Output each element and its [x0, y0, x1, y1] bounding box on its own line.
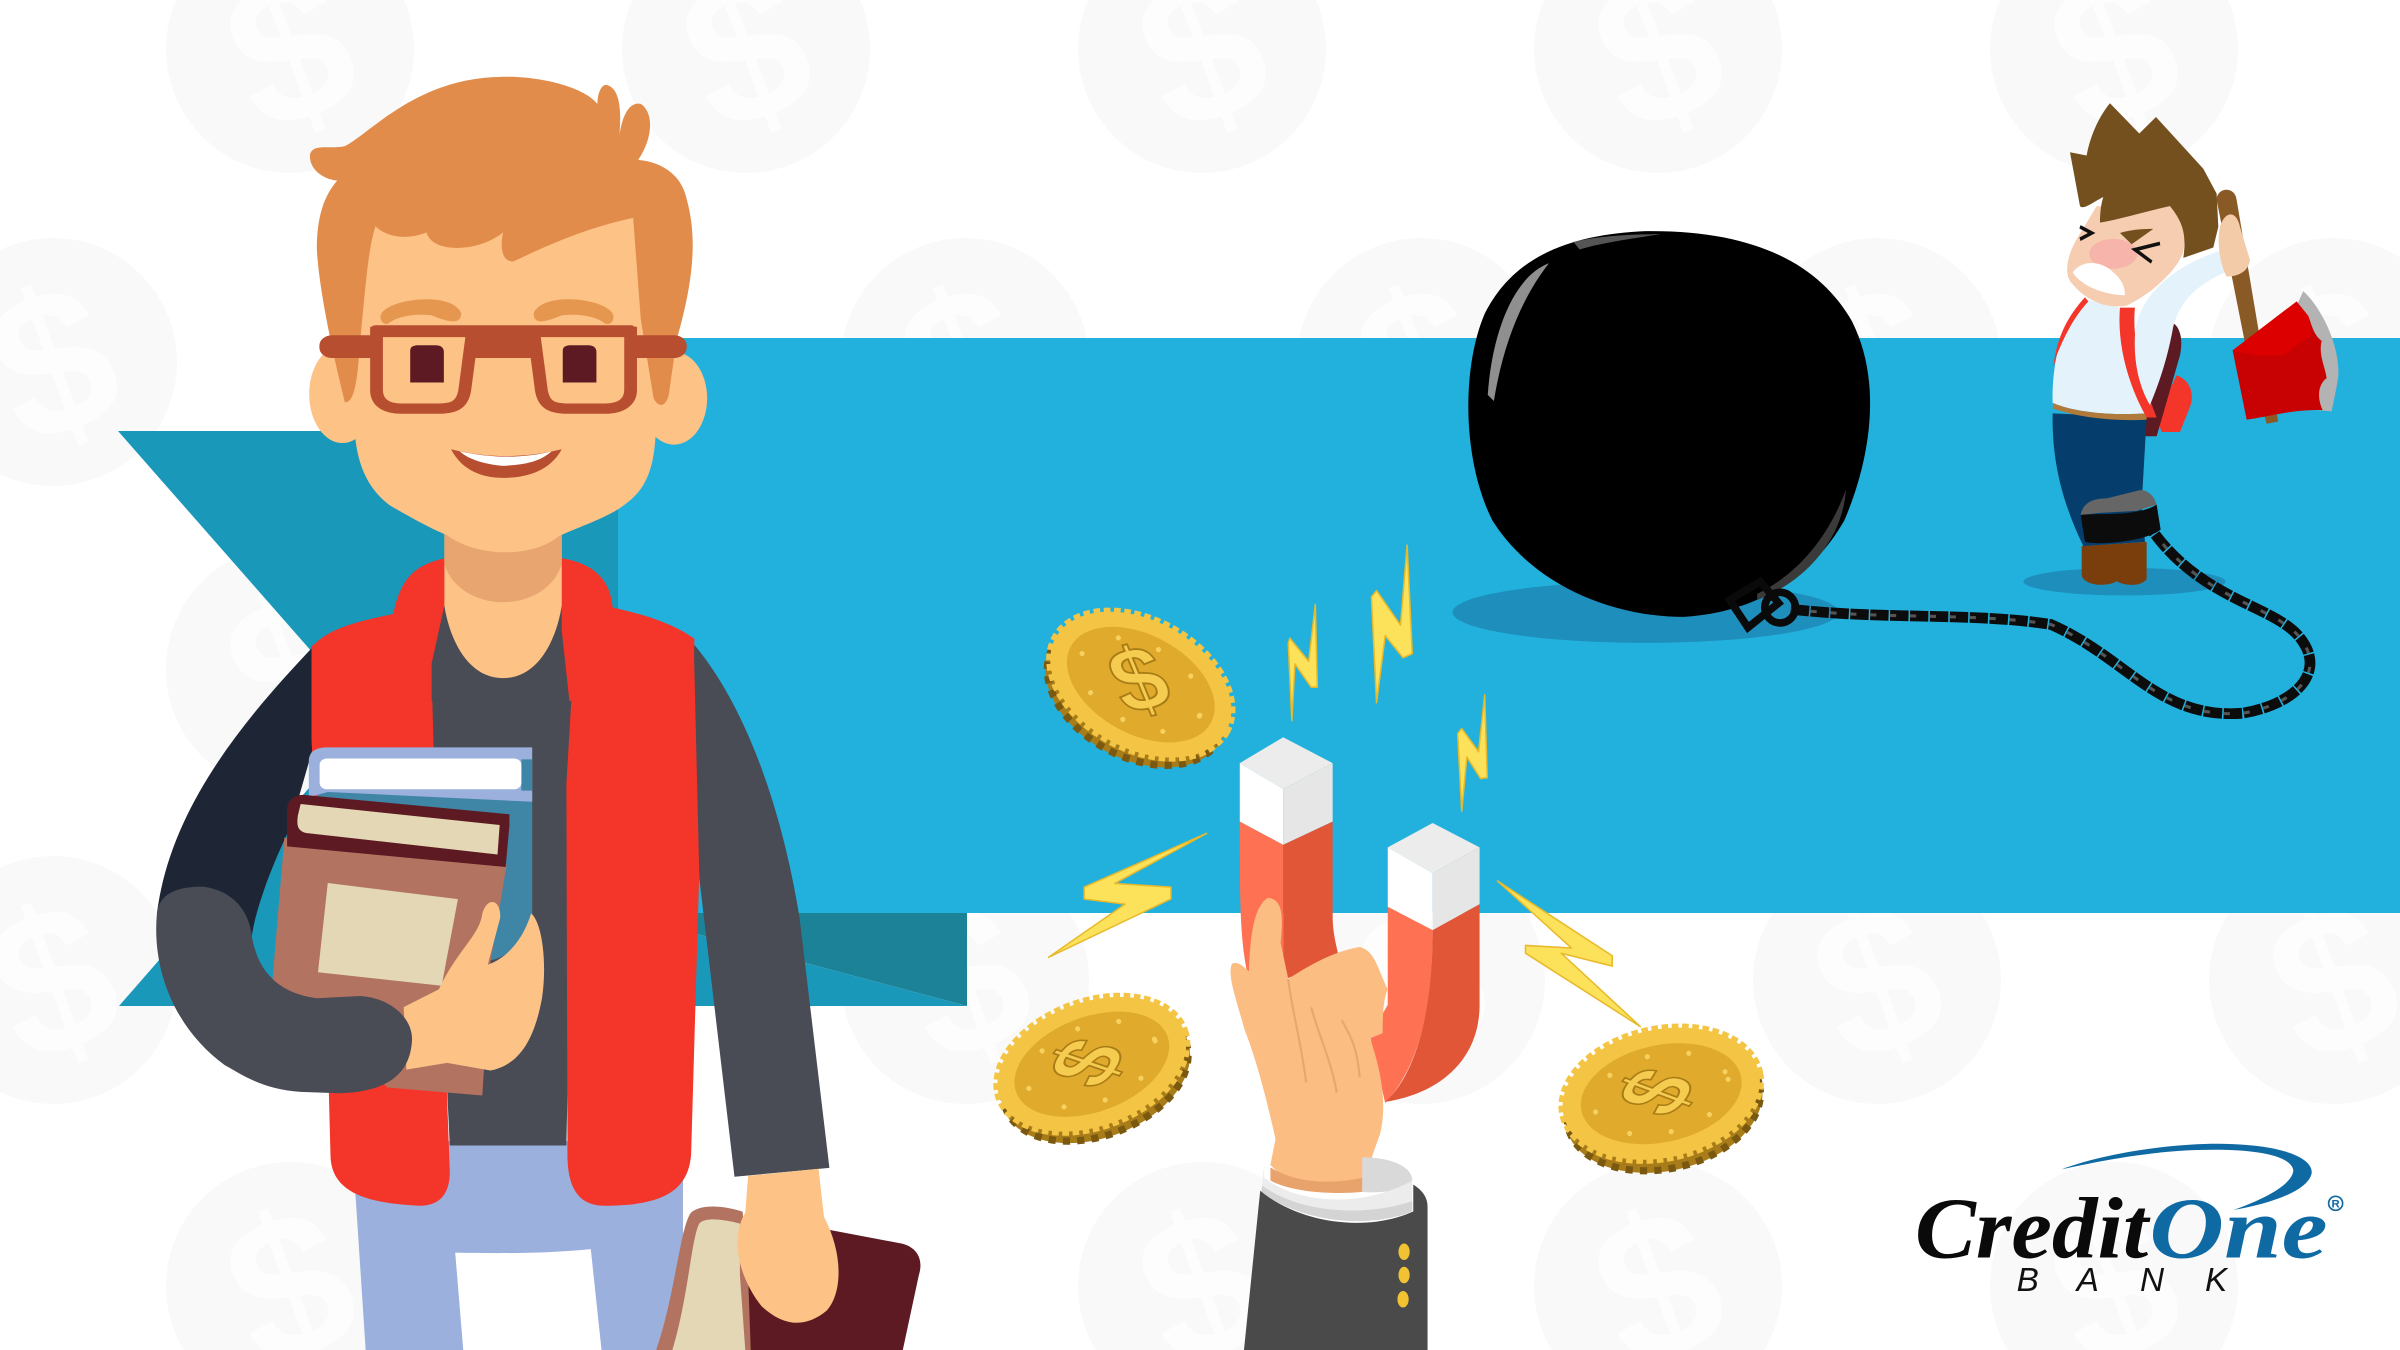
shirt, belt and straps: [2053, 297, 2157, 420]
ribbon: fold under band: [618, 913, 967, 1006]
logo wordmark Credit: Credit: [1915, 1179, 2151, 1276]
suit sleeve with gold buttons: [1244, 1185, 1428, 1350]
boots: [2082, 542, 2147, 585]
illustration: student holding books: [156, 77, 920, 1350]
logo word BANK: N: [2140, 1262, 2165, 1299]
background dollar coin watermark pattern: $: [873, 236, 1058, 491]
hand gripping the magnet: [1231, 898, 1388, 1193]
logo word BANK: A: [2075, 1262, 2099, 1299]
raised arm and hand: [2135, 214, 2250, 405]
ribbon: dark teal tail with notch: [118, 431, 640, 1006]
background dollar coin watermark pattern: $: [1329, 236, 1514, 491]
shackle attachment on ball: [1730, 582, 1795, 628]
ball shadow: [1453, 582, 1838, 643]
gold coin upper left: $: [1094, 625, 1183, 734]
gold coin lower right: [1549, 1009, 1776, 1191]
iron ball: [1468, 231, 1870, 617]
registered mark: R: [2332, 1199, 2340, 1211]
background dollar coin watermark pattern: $: [873, 854, 1058, 1109]
horseshoe magnet: [1240, 737, 1480, 1103]
background dollar coin watermark pattern: $: [1785, 236, 1970, 491]
trousers: [2053, 413, 2147, 546]
illustration: angry man with axe chained at ankle: [2053, 103, 2338, 585]
illustration: ball and chain: [1453, 231, 2310, 714]
backpack: [2145, 322, 2192, 436]
gold coin lower left: $: [1028, 1028, 1147, 1098]
registered mark: [2329, 1196, 2343, 1211]
head with hair, glasses and smile: [309, 77, 707, 701]
man shadow: [2023, 568, 2225, 595]
background dollar coin watermark pattern: $: [417, 236, 602, 491]
background dollar coin watermark pattern: $: [198, 543, 383, 798]
logo: Credit One Bank: [1915, 1144, 2343, 1299]
right arm sleeve and lower hand with book: [355, 641, 920, 1350]
logo wordmark One: One: [2149, 1179, 2328, 1276]
background dollar coin watermark pattern: $: [1785, 854, 1970, 1109]
shirt cuff: [1261, 1157, 1412, 1221]
chain: [1791, 528, 2310, 714]
torso t-shirt and scarf: [157, 632, 699, 1206]
logo word BANK: K: [2205, 1262, 2229, 1299]
logo swoosh: [2062, 1144, 2312, 1210]
logo word BANK: B: [2017, 1262, 2039, 1299]
ribbon: main blue band: [618, 338, 2400, 913]
gold coin upper left: [1019, 581, 1257, 798]
axe handle and blade: [2217, 190, 2338, 424]
lightning bolts: [1048, 545, 1640, 1027]
logo word BANK: [2017, 1262, 2229, 1299]
gold coin lower right: $: [1596, 1057, 1718, 1127]
angry face and spiky hair: [2067, 103, 2218, 306]
ankle shackle: [2081, 490, 2161, 543]
illustration: hand holding magnet with lightning and coins: [978, 545, 1776, 1350]
gold coin lower left: [978, 971, 1210, 1168]
books held under the arm: [156, 747, 544, 1096]
background dollar coin watermark pattern: $: [1329, 854, 1514, 1109]
